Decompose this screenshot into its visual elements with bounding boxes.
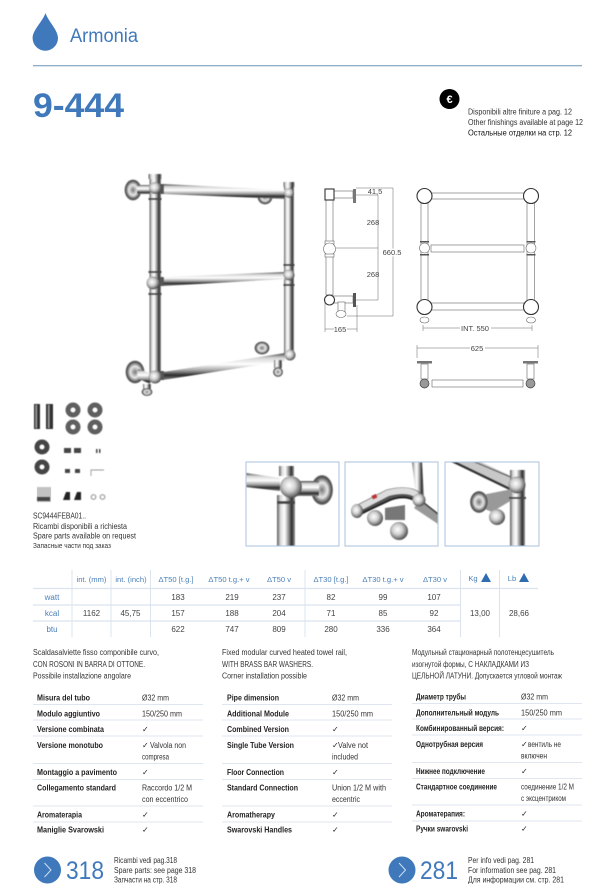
table header: ΔT50 v bbox=[267, 575, 291, 584]
dimension: interaxis: INT. 550 bbox=[461, 324, 489, 333]
Russian spec values: ✓ bbox=[521, 767, 528, 776]
table values: 82 bbox=[327, 593, 336, 602]
Italian spec values: ✓ bbox=[142, 810, 149, 820]
Russian spec labels: Стандартное соединение bbox=[416, 782, 497, 792]
Russian spec values: ✓ bbox=[521, 740, 528, 749]
table values: 809 bbox=[272, 625, 286, 634]
Russian spec labels: Ручки swarovski bbox=[416, 824, 468, 834]
table values: 188 bbox=[225, 609, 239, 618]
panel: Russian description and specs bbox=[412, 648, 582, 834]
table values: 747 bbox=[225, 625, 239, 634]
English spec values: eccentric bbox=[332, 795, 360, 804]
English spec labels: Additional Module bbox=[227, 710, 289, 718]
icon: euro badge: € bbox=[446, 94, 453, 106]
Italian spec values: 150/250 mm bbox=[142, 710, 182, 718]
panel: English description and specs bbox=[222, 648, 392, 834]
English spec values: Union 1/2 M with bbox=[332, 784, 386, 792]
Italian spec values: ✓ bbox=[142, 725, 149, 734]
reference text: Ricambi vedi pag.318 bbox=[114, 856, 177, 865]
table header: ΔT50 t.g.+ v bbox=[208, 575, 250, 584]
Russian spec labels: Дополнительный модуль bbox=[416, 708, 499, 718]
finishes text: Disponibili altre finiture a pag. 12 bbox=[468, 108, 572, 116]
page number: 281 bbox=[420, 857, 458, 885]
table values: 92 bbox=[430, 609, 439, 618]
title: model number: 9-444 bbox=[33, 87, 124, 125]
Italian spec values: ✓ bbox=[142, 768, 149, 777]
dimensions side: 165 bbox=[334, 325, 346, 334]
Italian spec labels: Aromaterapia bbox=[37, 810, 82, 820]
Italian description: CON ROSONI IN BARRA DI OTTONE. bbox=[33, 660, 145, 669]
English spec values: ✓ bbox=[332, 826, 339, 834]
panel: Italian description and specs bbox=[33, 648, 203, 834]
table header: int. (inch) bbox=[115, 575, 147, 584]
English spec values bbox=[332, 694, 386, 834]
dimensions side: 41,5 bbox=[368, 187, 382, 196]
row labels: btu bbox=[46, 625, 58, 634]
reference text: Для информации см. стр. 281 bbox=[468, 876, 564, 884]
dimensions side: 268 bbox=[367, 218, 379, 227]
Italian spec values: compresa bbox=[142, 752, 169, 762]
table header bbox=[77, 573, 529, 584]
English description: Corner installation possible bbox=[222, 672, 307, 680]
table header: ΔT30 t.g.+ v bbox=[362, 575, 404, 584]
Russian spec labels: Однотрубная версия bbox=[416, 740, 483, 749]
reference text bbox=[114, 856, 196, 884]
Russian spec labels: Ароматерапия: bbox=[416, 810, 465, 818]
Italian description bbox=[33, 648, 159, 680]
Italian description: Possibile installazione angolare bbox=[33, 672, 131, 680]
English spec labels: Single Tube Version bbox=[227, 741, 294, 750]
table header: int. (mm) bbox=[77, 575, 107, 584]
dimension: width: 625 bbox=[471, 344, 483, 353]
table values: 45,75 bbox=[120, 609, 141, 618]
English spec labels: Floor Connection bbox=[227, 768, 284, 777]
English spec labels: Aromatherapy bbox=[227, 810, 275, 820]
reference text bbox=[468, 856, 564, 884]
product photo: towel rail bbox=[124, 174, 296, 396]
Russian spec values: соединение 1/2 М bbox=[521, 782, 574, 792]
technical drawing: top view bbox=[417, 344, 538, 388]
English spec values: ✓ bbox=[332, 810, 339, 820]
English spec values: 150/250 mm bbox=[332, 710, 373, 718]
Russian spec values: 150/250 mm bbox=[521, 708, 562, 718]
table values: 219 bbox=[225, 593, 239, 602]
icon: arrow circle bbox=[34, 856, 61, 884]
Italian spec labels: Versione monotubo bbox=[37, 741, 103, 750]
Italian spec labels: Versione combinata bbox=[37, 725, 104, 734]
table values: 183 bbox=[171, 593, 185, 602]
Italian description: Scaldasalviette fisso componibile curvo, bbox=[33, 648, 159, 657]
Russian spec labels: Нижнее подключение bbox=[416, 767, 485, 776]
English spec labels: Combined Version bbox=[227, 725, 289, 734]
page number: 318 bbox=[66, 857, 104, 885]
Italian spec labels: Maniglie Svarowski bbox=[37, 826, 104, 834]
Italian spec values: Raccordo 1/2 M bbox=[142, 784, 192, 792]
row labels bbox=[44, 593, 60, 634]
finishes note bbox=[440, 89, 583, 138]
Russian description bbox=[412, 648, 563, 680]
Italian spec values bbox=[142, 694, 192, 834]
spare parts photo bbox=[34, 404, 105, 502]
dimensions side: 660.5 bbox=[383, 248, 401, 257]
spare parts caption: Запасные части под заказ bbox=[33, 541, 111, 550]
reference text: For information see pag. 281 bbox=[468, 866, 556, 875]
spare parts caption: Ricambi disponibili a richiesta bbox=[33, 522, 127, 531]
English spec labels: Pipe dimension bbox=[227, 694, 279, 702]
English description bbox=[222, 648, 347, 680]
Russian spec values: с эксцентриком bbox=[521, 794, 566, 803]
table values: 204 bbox=[272, 609, 286, 618]
dimensions side bbox=[334, 187, 401, 334]
table header: ΔT30 [t.g.] bbox=[313, 575, 349, 584]
table values: 157 bbox=[171, 609, 185, 618]
Italian spec labels: Misura del tubo bbox=[37, 694, 90, 702]
Italian spec values: con eccentrico bbox=[142, 795, 188, 804]
Italian spec values: ✓ bbox=[142, 741, 149, 750]
table header: ΔT30 v bbox=[423, 575, 447, 584]
Italian spec labels: Montaggio a pavimento bbox=[37, 768, 117, 777]
Italian spec labels bbox=[37, 694, 117, 834]
English spec labels: Standard Connection bbox=[227, 784, 298, 792]
dimensions side: 268 bbox=[367, 270, 379, 279]
row labels: watt bbox=[44, 593, 60, 602]
table values: 107 bbox=[427, 593, 441, 602]
performance table bbox=[33, 570, 538, 637]
reference text: Spare parts: see page 318 bbox=[114, 866, 196, 875]
Russian description: Модульный стационарный полотенцесушитель bbox=[412, 648, 554, 657]
icon: euro badge bbox=[440, 89, 460, 109]
row labels: kcal bbox=[45, 609, 59, 618]
Russian description: изогнутой формы, С НАКЛАДКАМИ ИЗ bbox=[412, 660, 529, 669]
Italian spec labels: Modulo aggiuntivo bbox=[37, 710, 100, 718]
table values: 237 bbox=[272, 593, 286, 602]
Russian spec values: вентиль не bbox=[528, 740, 561, 749]
Russian spec values: Ø32 mm bbox=[521, 692, 548, 702]
Italian spec labels: Collegamento standard bbox=[37, 784, 116, 792]
Russian spec values: ✓ bbox=[521, 724, 528, 733]
footer reference: information page bbox=[388, 856, 564, 885]
Italian spec values: Valvola non bbox=[150, 741, 186, 750]
English spec labels bbox=[227, 694, 298, 834]
Russian spec values: включен bbox=[521, 752, 547, 760]
table values: 99 bbox=[379, 593, 388, 602]
table values: 622 bbox=[171, 625, 185, 634]
Italian spec values: ✓ bbox=[142, 826, 149, 834]
table values: 71 bbox=[327, 609, 336, 618]
table values: 1162 bbox=[83, 609, 101, 618]
detail photo: angled connector bbox=[445, 458, 539, 547]
Russian spec values: ✓ bbox=[521, 810, 528, 818]
Italian spec values: Ø32 mm bbox=[142, 694, 169, 702]
English spec values: ✓ bbox=[332, 725, 339, 734]
English spec labels: Swarovski Handles bbox=[227, 826, 292, 834]
finishes text bbox=[468, 108, 583, 138]
spare parts caption: Spare parts available on request bbox=[33, 532, 137, 540]
Russian spec values: ✓ bbox=[521, 824, 528, 834]
Russian spec labels: Комбинированный версия: bbox=[416, 724, 504, 733]
table values bbox=[83, 593, 530, 634]
table header: Lb bbox=[508, 574, 516, 583]
English spec values: Valve not bbox=[338, 741, 369, 750]
footer reference: spare parts page bbox=[34, 856, 196, 885]
detail photo: wall bracket bbox=[246, 462, 339, 547]
brand name: Armonia bbox=[70, 26, 138, 47]
detail photo: valve bbox=[345, 462, 438, 546]
icon: arrow circle bbox=[388, 856, 416, 884]
English description: Fixed modular curved heated towel rail, bbox=[222, 648, 347, 657]
spare parts caption bbox=[33, 512, 137, 550]
finishes text: Other finishings available at page 12 bbox=[468, 118, 583, 127]
table header: Kg bbox=[468, 574, 478, 583]
Russian spec labels: Диаметр трубы bbox=[416, 692, 466, 702]
table values: 280 bbox=[324, 625, 338, 634]
English spec values: ✓ bbox=[332, 768, 339, 777]
table values: 13,00 bbox=[470, 609, 491, 618]
English description: WITH BRASS BAR WASHERS. bbox=[222, 660, 313, 669]
dimensions side: 660.5 bbox=[383, 248, 401, 257]
header: brand bbox=[33, 13, 138, 51]
English spec values: ✓ bbox=[332, 741, 339, 750]
Russian spec labels bbox=[416, 692, 504, 834]
English spec values: included bbox=[332, 752, 358, 762]
Russian description: ЦЕЛЬНОЙ ЛАТУНИ. Допускается угловой монтаж bbox=[412, 672, 563, 680]
icon: water drop bbox=[33, 13, 58, 51]
table values: 28,66 bbox=[509, 609, 530, 618]
table values: 85 bbox=[379, 609, 388, 618]
reference text: Per info vedi pag. 281 bbox=[468, 856, 534, 865]
spare parts caption: SC9444FEBA01.. bbox=[33, 512, 86, 520]
table header: ΔT50 [t.g.] bbox=[158, 575, 194, 584]
table values: 364 bbox=[427, 625, 441, 634]
reference text: Запчасти на стр. 318 bbox=[114, 876, 177, 884]
English spec values: Ø32 mm bbox=[332, 694, 359, 702]
table values: 336 bbox=[376, 625, 390, 634]
finishes text: Остальные отделки на стр. 12 bbox=[468, 128, 573, 138]
Russian spec values bbox=[521, 692, 574, 834]
technical drawing: side view bbox=[324, 187, 401, 334]
technical drawing: front view bbox=[417, 188, 538, 333]
